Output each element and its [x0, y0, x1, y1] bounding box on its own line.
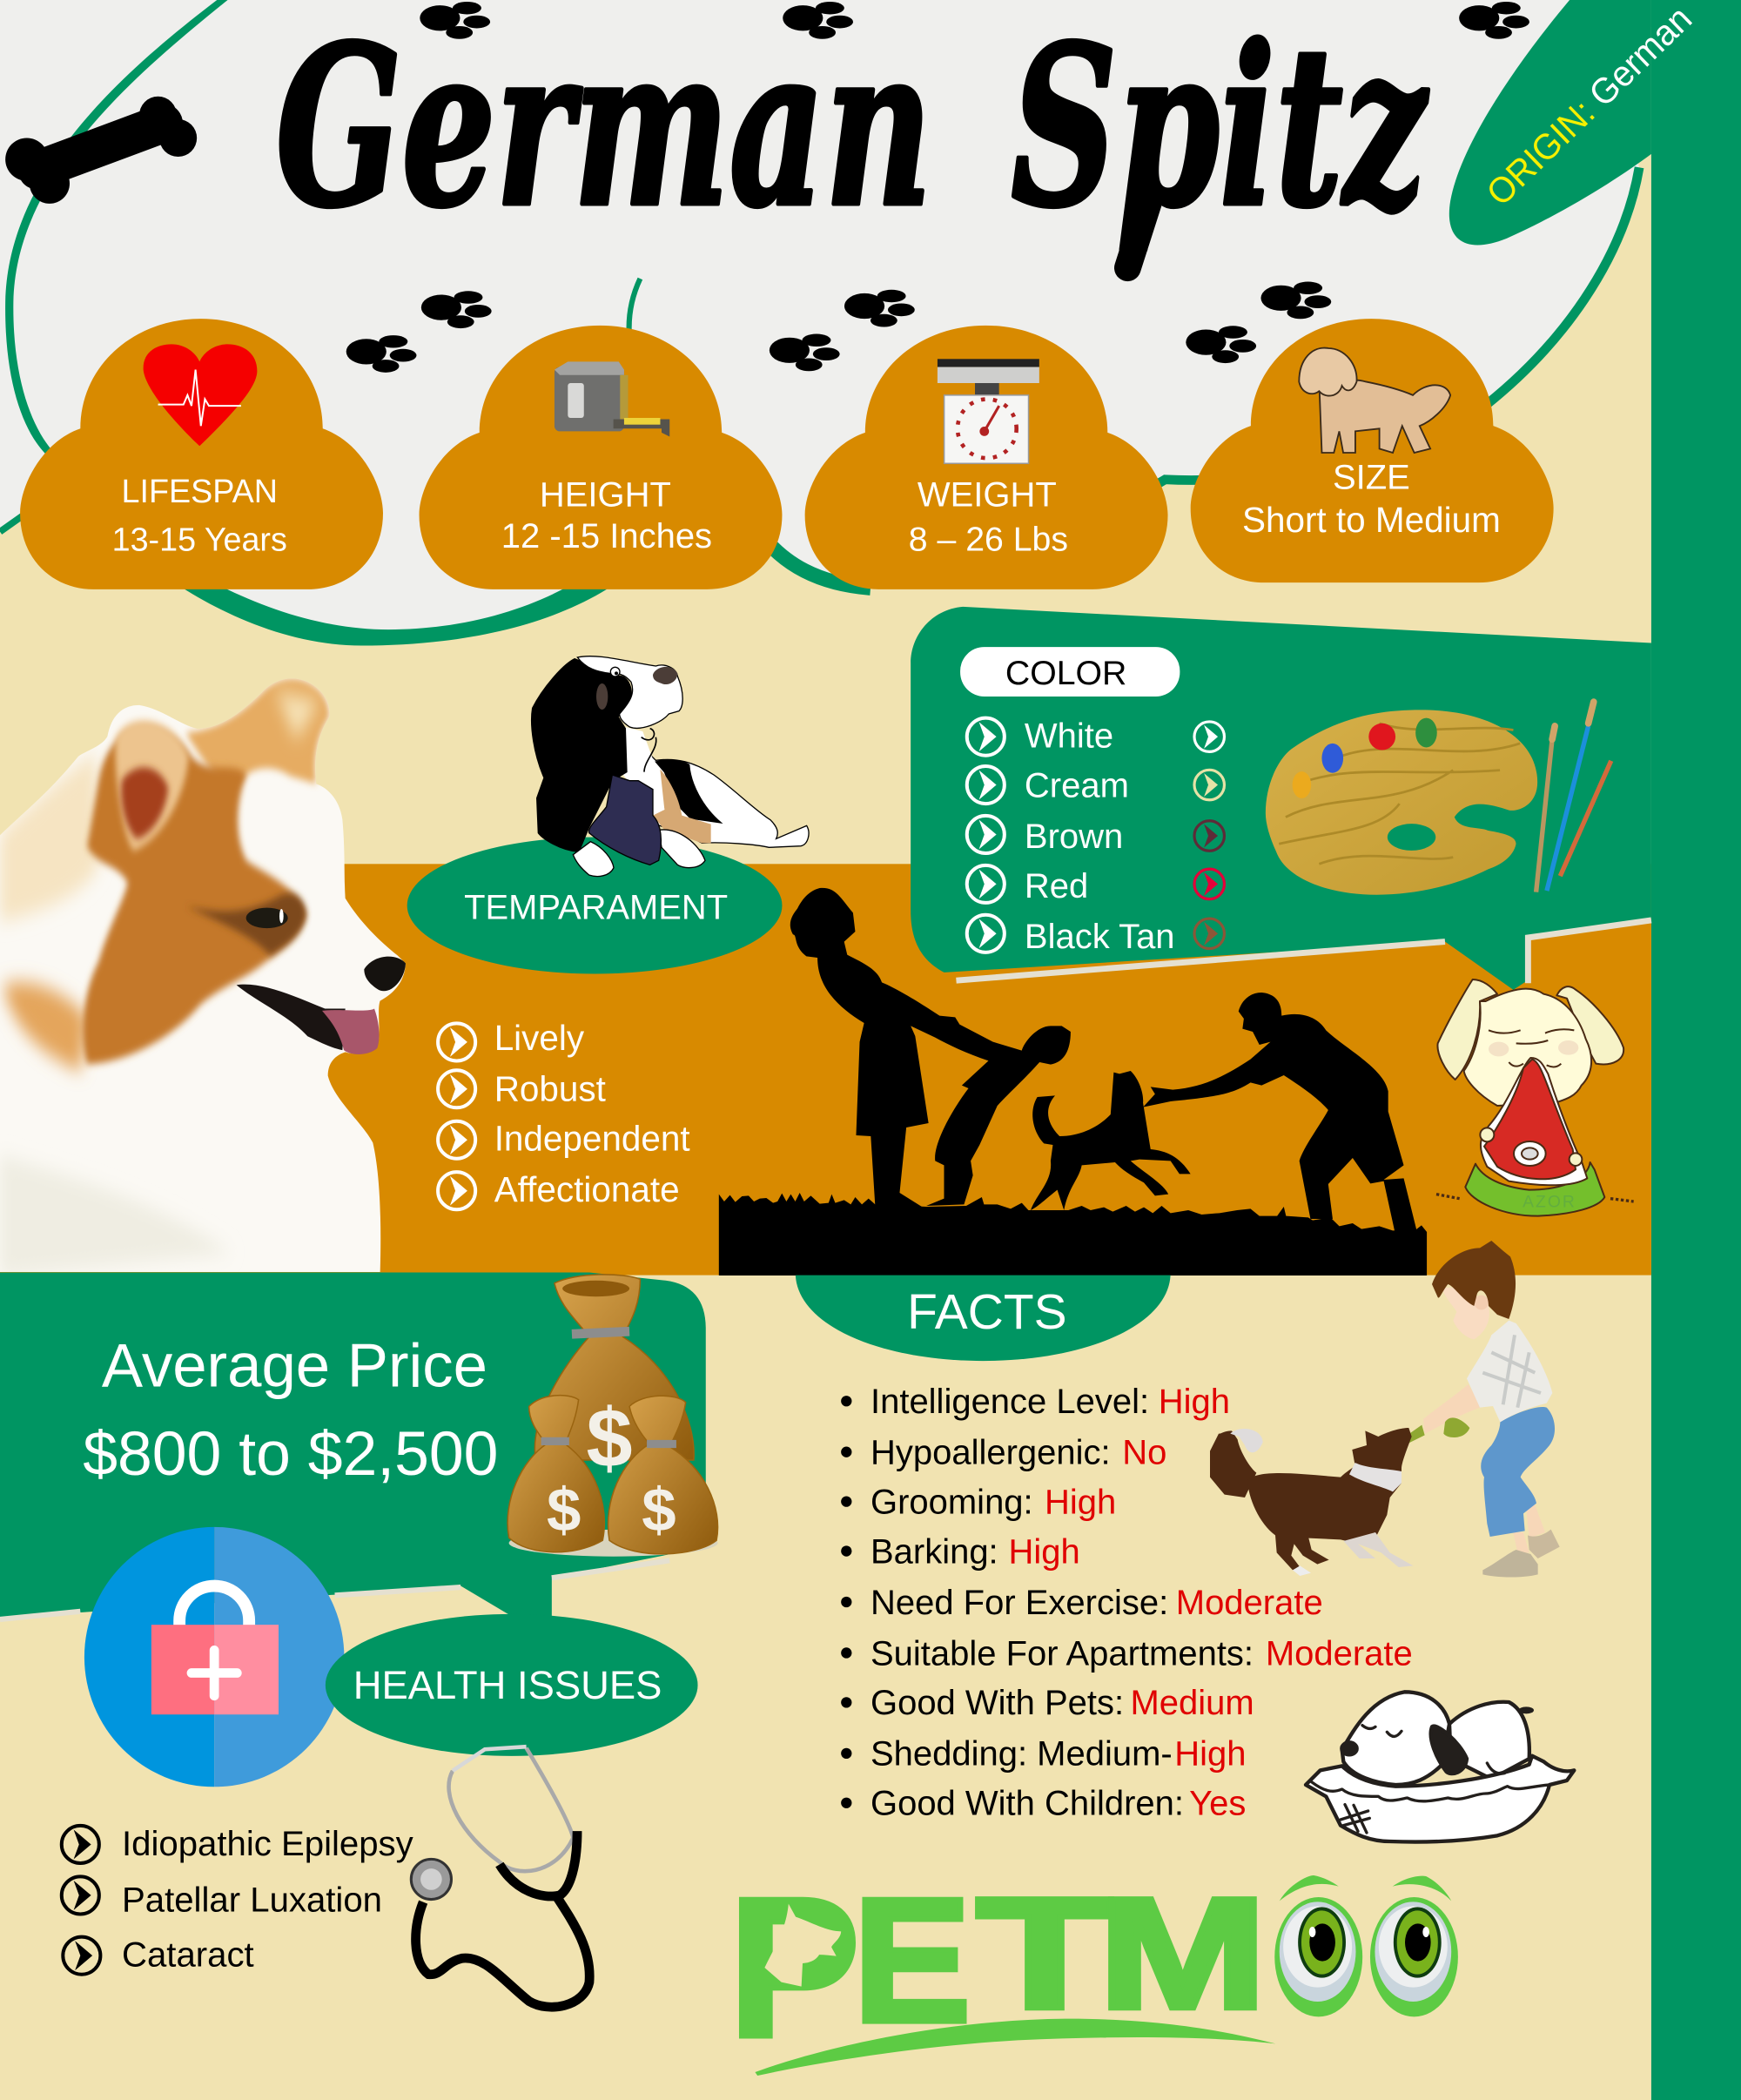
ground and grass	[719, 1193, 1427, 1275]
origin text: ORIGIN: German	[1478, 0, 1699, 213]
facts list: Good With Pets:	[870, 1684, 1124, 1722]
temperament list	[438, 1018, 690, 1209]
panel: height	[420, 326, 782, 589]
health issues list	[62, 1824, 413, 1975]
icon: bone	[5, 97, 197, 204]
price heading: Average Price	[102, 1330, 487, 1399]
right green bar	[1651, 0, 1741, 2100]
brown dog	[1210, 1428, 1413, 1576]
icon: tan dog	[1299, 348, 1450, 453]
panel: lifespan	[20, 319, 383, 589]
temperament heading text: TEMPARAMENT	[464, 888, 728, 926]
facts list	[841, 1383, 1413, 1823]
boy	[1393, 1241, 1560, 1577]
health issues list: Patellar Luxation	[122, 1880, 382, 1919]
dog	[1031, 1071, 1191, 1210]
color list	[967, 717, 1175, 956]
facts list: Medium	[1130, 1684, 1254, 1722]
header lobe: left	[5, 0, 642, 646]
origin banner	[1449, 0, 1699, 245]
bag dollar signs	[547, 1393, 676, 1544]
logo wordmark: T	[977, 1866, 1112, 2042]
temperament list: Affectionate	[494, 1169, 680, 1209]
lifespan value: 13-15 Years	[112, 521, 287, 557]
price panel	[0, 1273, 706, 1619]
dog nose	[364, 957, 406, 991]
facts list: High	[1174, 1735, 1246, 1774]
icon: paint palette	[1266, 702, 1611, 895]
facts list: Moderate	[1176, 1584, 1323, 1622]
temperament list: Lively	[494, 1018, 585, 1058]
bowl label: AZOR	[1523, 1194, 1576, 1212]
bag dollar signs: $	[547, 1475, 581, 1544]
height label: HEIGHT	[540, 476, 671, 515]
facts list: High	[1159, 1383, 1230, 1421]
bag dollar signs: $	[642, 1475, 676, 1544]
woman and child	[790, 888, 1071, 1207]
weight value: 8 – 26 Lbs	[909, 520, 1068, 558]
health circle icon	[84, 1527, 344, 1787]
icon: stethoscope	[411, 1747, 589, 2007]
facts list: Shedding: Medium-	[870, 1735, 1173, 1774]
health issues text: HEALTH ISSUES	[353, 1663, 662, 1707]
facts list: Suitable For Apartments:	[870, 1634, 1254, 1673]
logo wordmark: E	[853, 1862, 971, 2060]
color list: Brown	[1025, 818, 1123, 856]
silhouette: family playing with dog	[719, 888, 1427, 1275]
facts list: Moderate	[1266, 1634, 1413, 1673]
weight label: WEIGHT	[918, 476, 1057, 515]
facts list: Need For Exercise:	[870, 1584, 1168, 1622]
logo: petmoo	[729, 1857, 1458, 2078]
illustration: sleeping dogs in basket	[1306, 1692, 1574, 1842]
logo swoosh	[755, 2019, 1275, 2076]
facts list: No	[1122, 1434, 1166, 1472]
facts list: High	[1045, 1483, 1116, 1521]
facts list: Hypoallergenic:	[870, 1434, 1111, 1472]
icon: scale	[938, 359, 1039, 463]
color list: Cream	[1025, 766, 1129, 804]
color panel	[911, 607, 1651, 990]
facts list: Yes	[1189, 1785, 1246, 1823]
color list: Black Tan	[1025, 918, 1175, 956]
logo wordmark: P	[729, 1857, 860, 2078]
color heading pill	[960, 647, 1180, 697]
logo wordmark: M	[1099, 1866, 1267, 2042]
facts heading text: FACTS	[907, 1284, 1067, 1340]
color list: Red	[1025, 867, 1088, 905]
panel: size	[1191, 319, 1554, 582]
temperament heading oval	[407, 838, 782, 973]
cartoon bunny eating meat	[1436, 979, 1634, 1216]
height value: 12 -15 Inches	[501, 517, 712, 555]
price value: $800 to $2,500	[83, 1419, 498, 1489]
lifespan label: LIFESPAN	[122, 473, 278, 509]
color heading text: COLOR	[1005, 654, 1126, 692]
logo eyes	[1274, 1875, 1458, 2016]
size label: SIZE	[1333, 459, 1410, 497]
facts list: Grooming:	[870, 1483, 1033, 1521]
bag dollar signs: $	[586, 1393, 633, 1485]
title: Spitz	[1012, 0, 1429, 256]
dog tongue	[322, 1009, 380, 1054]
temperament list: Robust	[494, 1069, 606, 1109]
paw prints	[346, 2, 1529, 373]
header lobe: right	[402, 0, 1639, 588]
icon: money bags	[508, 1275, 718, 1557]
facts list: High	[1008, 1532, 1080, 1571]
health issues oval	[326, 1614, 698, 1756]
icon: tape measure	[555, 361, 669, 437]
health issues list: Idiopathic Epilepsy	[122, 1824, 413, 1863]
facts heading oval	[796, 1275, 1171, 1361]
man	[1143, 993, 1417, 1232]
color list: White	[1025, 717, 1113, 755]
health issues list: Cataract	[122, 1935, 254, 1974]
logo dog head cutout	[764, 1904, 841, 1987]
title: German	[276, 0, 932, 256]
panel: weight	[805, 326, 1168, 589]
cartoon dog with shoe	[532, 656, 809, 877]
size value: Short to Medium	[1242, 500, 1501, 540]
temperament list: Independent	[494, 1119, 690, 1159]
dog mouth	[237, 985, 346, 1050]
facts list: Barking:	[870, 1532, 998, 1571]
color swatches	[1194, 722, 1224, 949]
photo: spitz dog	[0, 662, 412, 1277]
facts list: Intelligence Level:	[870, 1383, 1149, 1421]
icon: heart	[144, 344, 257, 446]
illustration: boy playing with dog	[1210, 1241, 1560, 1577]
orange temperament band	[0, 864, 1651, 1275]
light header backdrop	[0, 0, 428, 532]
facts list: Good With Children:	[870, 1785, 1184, 1823]
dog eye	[246, 908, 288, 928]
logo wordmark	[729, 1857, 1267, 2078]
